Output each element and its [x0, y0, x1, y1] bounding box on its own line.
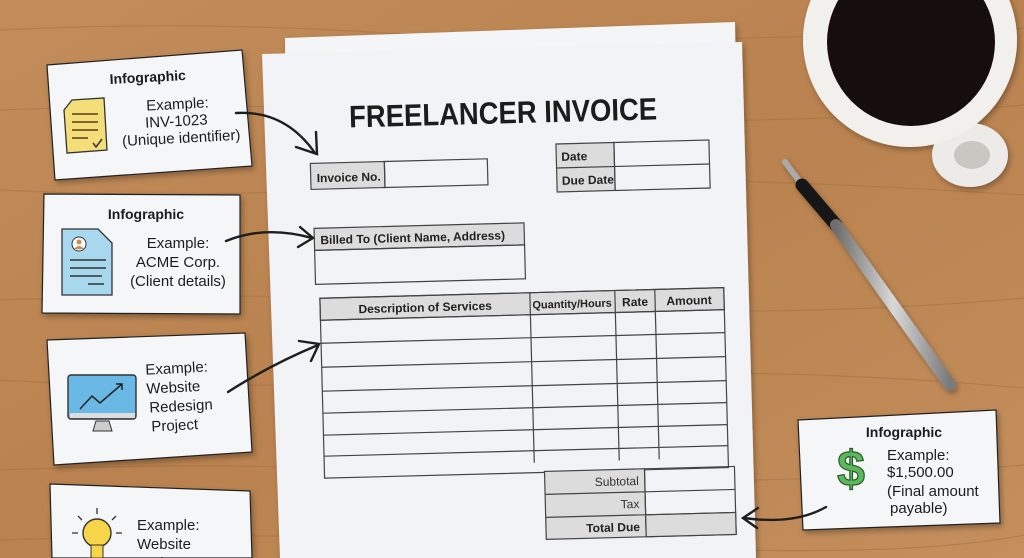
- billed to: [314, 223, 525, 284]
- date fields: Date: [561, 149, 588, 164]
- card 5: total amount: [798, 410, 1000, 530]
- card 3: project: Redesign: [149, 396, 213, 417]
- services table: Rate: [622, 295, 649, 309]
- arrow 2: [226, 227, 313, 247]
- card 2: client: [42, 194, 240, 314]
- totals: Tax: [621, 497, 640, 511]
- date fields: Due Date: [562, 172, 614, 188]
- title: FREELANCER INVOICE: [349, 91, 658, 134]
- arrow 3: [228, 341, 319, 392]
- paper sheets: [262, 22, 756, 558]
- card 4: partial bottom card: [50, 484, 252, 558]
- icon: monitor with chart: [68, 375, 136, 431]
- card 3: project: Example:: [145, 359, 208, 379]
- card 4: partial bottom card: Website: [137, 536, 191, 553]
- card 3: project: Project: [151, 416, 199, 436]
- card 1: invoice number: [47, 50, 252, 180]
- card 2: client: (Client details): [130, 273, 226, 290]
- card 5: total amount: Example:: [887, 447, 950, 464]
- card 1: invoice number: Infographic: [109, 67, 186, 87]
- card 2: client: Example:: [147, 235, 209, 252]
- services table: Amount: [666, 293, 712, 308]
- card 3: project: Website: [146, 378, 201, 398]
- icon: dollar sign: $: [837, 441, 865, 497]
- pen: [785, 162, 950, 385]
- totals: Total Due: [586, 520, 640, 535]
- card 2: client: Infographic: [108, 206, 184, 222]
- billed to: Billed To (Client Name, Address): [320, 228, 505, 247]
- icon: lightbulb: [72, 508, 122, 558]
- card 5: total amount: (Final amount: [887, 483, 980, 500]
- coffee cup: [803, 0, 1017, 187]
- totals: Subtotal: [595, 474, 639, 489]
- card 2: client: ACME Corp.: [136, 254, 220, 271]
- arrows: [226, 113, 826, 528]
- services table: [320, 288, 728, 478]
- arrow 1: [236, 113, 317, 154]
- card 1: invoice number: Example:: [146, 94, 209, 115]
- card 5: total amount: payable): [890, 500, 948, 517]
- services table: Quantity/Hours: [532, 298, 612, 312]
- totals: [544, 466, 736, 539]
- date fields: [556, 140, 710, 192]
- card 3: project: [47, 333, 252, 465]
- card 4: partial bottom card: Example:: [137, 517, 200, 534]
- invoice form: [309, 90, 736, 545]
- card 1: invoice number: INV-1023: [145, 111, 208, 132]
- card 5: total amount: $1,500.00: [887, 464, 954, 481]
- invoice no field: Invoice No.: [317, 170, 381, 185]
- icon: document with check: [64, 98, 107, 153]
- invoice no field: [310, 159, 488, 189]
- card 5: total amount: Infographic: [866, 424, 942, 440]
- card 1: invoice number: (Unique identifier): [122, 127, 241, 150]
- arrow 4: [743, 507, 826, 528]
- services table: Description of Services: [358, 299, 492, 316]
- icon: client document: [62, 229, 112, 295]
